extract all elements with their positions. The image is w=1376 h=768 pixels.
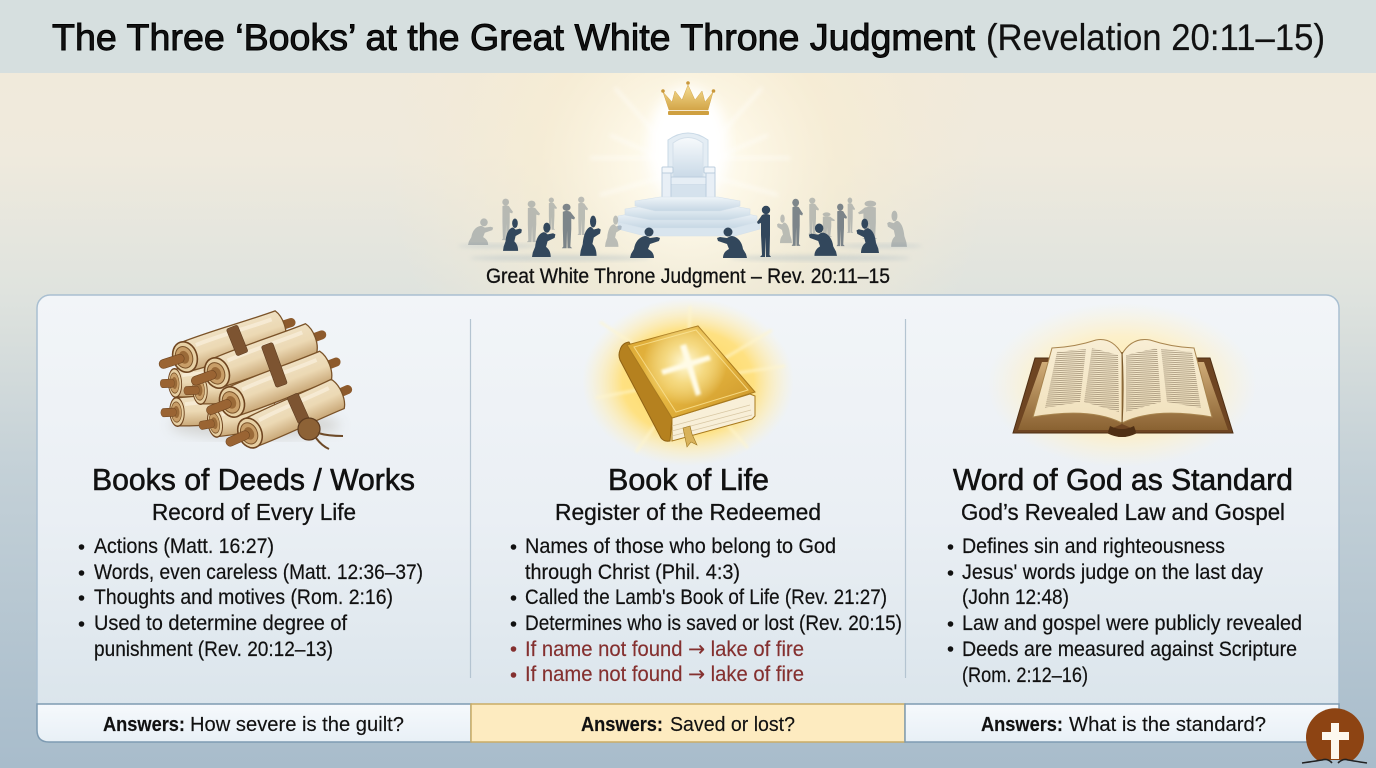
- icon: scrolls: [154, 306, 358, 458]
- page text lines: [1045, 348, 1201, 412]
- answer box: standard: Answers:: [981, 714, 1063, 736]
- bullet list: Actions (Matt. 16:27): [94, 535, 274, 558]
- icon: glowing golden book: [582, 298, 794, 466]
- illustration: great white throne scene: [458, 81, 922, 261]
- answer box: deeds: Answers:: [103, 714, 185, 736]
- subheading: Register of the Redeemed: [555, 499, 821, 525]
- bullet list: Words, even careless (Matt. 12:36–37): [94, 561, 423, 584]
- column: book of life: [511, 298, 902, 686]
- answer box: deeds: How severe is the guilt?: [190, 714, 404, 736]
- ground shadows: [458, 244, 922, 261]
- bullet list: (John 12:48): [962, 586, 1069, 609]
- bullet list: Names of those who belong to God: [525, 535, 836, 558]
- straps: [226, 325, 310, 424]
- column: books of deeds: [79, 306, 423, 661]
- heading: Books of Deeds / Works: [92, 462, 415, 497]
- throne glow: [648, 87, 728, 203]
- answer box: standard: [905, 704, 1339, 742]
- bullet list: punishment (Rev. 20:12–13): [94, 638, 333, 661]
- foreground figures: [503, 206, 879, 258]
- heading: Word of God as Standard: [953, 462, 1293, 497]
- answer box: standard: What is the standard?: [1069, 714, 1266, 736]
- throne steps: [618, 197, 760, 236]
- bullet list: Thoughts and motives (Rom. 2:16): [94, 586, 393, 609]
- bullet list: Defines sin and righteousness: [962, 535, 1225, 558]
- bullet list: Used to determine degree of: [94, 612, 347, 635]
- bullet list: Called the Lamb's Book of Life (Rev. 21:27): [525, 586, 887, 609]
- icon: crown: [661, 81, 715, 115]
- subheading: Record of Every Life: [152, 499, 356, 525]
- bullet list: Determines who is saved or lost (Rev. 20:15): [525, 612, 902, 635]
- column: word of god: [948, 303, 1302, 687]
- bullet list: [79, 535, 423, 661]
- icon: throne: [662, 133, 715, 202]
- title: (Revelation 20:11–15): [986, 17, 1325, 58]
- background figures: [468, 197, 907, 247]
- answer box: life: Answers:: [581, 714, 663, 736]
- answer box: life: [471, 704, 905, 742]
- title: The Three ‘Books’ at the Great White Throne Judgment: [52, 17, 976, 58]
- light rays: [590, 88, 790, 195]
- subheading: God’s Revealed Law and Gospel: [961, 499, 1285, 525]
- bullet list: Deeds are measured against Scripture: [962, 638, 1297, 661]
- panel: three books: [37, 295, 1339, 742]
- wax seal: [298, 418, 320, 440]
- bullet list: (Rom. 2:12–16): [962, 664, 1088, 687]
- bullet list: Jesus' words judge on the last day: [962, 561, 1263, 584]
- heading: Book of Life: [608, 462, 769, 497]
- bullet list: Law and gospel were publicly revealed: [962, 612, 1302, 635]
- title bar: [0, 0, 1376, 73]
- bullet list: If name not found → lake of fire: [525, 662, 804, 686]
- bullet list: through Christ (Phil. 4:3): [525, 561, 740, 584]
- bullet list: If name not found → lake of fire: [525, 637, 804, 661]
- answer box: deeds: [37, 704, 471, 742]
- icon: cross logo: [1302, 708, 1367, 763]
- bullet list: [511, 535, 902, 686]
- icon: open bible: [987, 303, 1257, 467]
- answer box: life: Saved or lost?: [670, 714, 795, 736]
- mid figures: [562, 199, 847, 248]
- bullet list: [948, 535, 1302, 687]
- throne caption: Great White Throne Judgment – Rev. 20:11–15: [486, 265, 890, 288]
